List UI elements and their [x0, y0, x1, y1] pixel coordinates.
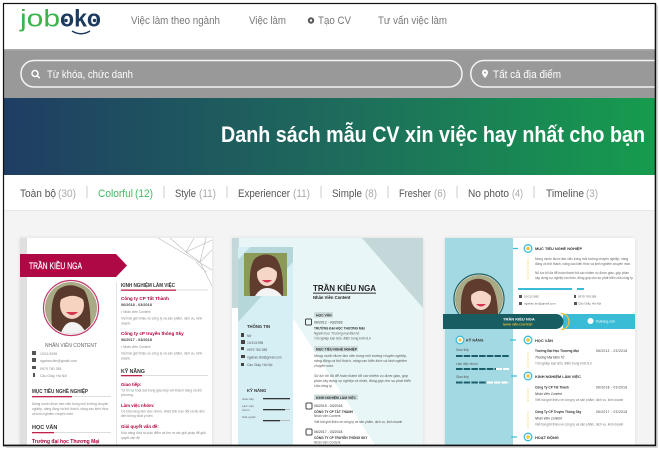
name heading [313, 283, 376, 300]
timeline sections [510, 245, 633, 441]
right column sections: Sử lực tôi đủ để hoàn thành tốt các nhiệm vụ được giao, góp [314, 374, 408, 378]
left column text: và kinh nghiệm chuyên môn. [32, 412, 74, 416]
filter tabs: Simple [332, 188, 362, 200]
filter tabs: (30) [58, 188, 76, 200]
timeline sections: Viết bài giới thiệu về công ty và sản phẩm, dịch vụ, kinh doanh [535, 422, 624, 426]
timeline sections: Cầu Giấy, Hà Nội [578, 302, 601, 306]
name band: thutrang.com [596, 320, 615, 324]
right column sections: chuyên môn. [314, 364, 334, 368]
nav links: Việc làm [249, 15, 286, 27]
name ribbon: TRẦN KIỀU NGA [29, 261, 82, 271]
right column sections: năng động và thử thách, nâng cao kiến thức và kinh nghiệm [314, 359, 407, 363]
timeline sections: 06/2017 - 03/2018 [596, 410, 627, 414]
sidebar [238, 247, 293, 445]
filter tabs: Colorful [98, 188, 133, 200]
location field [471, 60, 659, 87]
sidebar: Giao tiếp [242, 397, 254, 401]
timeline sections: MỤC TIÊU NGHỀ NGHIỆP [535, 246, 583, 251]
left column text: 10/11/1995 [40, 352, 57, 356]
timeline sections: ngahan.tlm@gmail.com [524, 302, 556, 306]
sidebar: 0979 760 285 [247, 348, 267, 352]
filter tabs: Fresher [399, 188, 431, 200]
sidebar: THÔNG TIN [247, 324, 270, 329]
timeline sections: Nhân Viên Content [535, 392, 562, 396]
name heading: Nhân Viên Content [313, 295, 351, 300]
location field: Tất cả địa điểm [493, 69, 561, 81]
timeline sections: Nỗ lực tối đa để hoàn thành tốt các nhiệm vụ được giao, góp phần [535, 270, 629, 275]
right column sections: MỤC TIÊU NGHỀ NGHIỆP [316, 346, 358, 352]
sidebar: KỸ NĂNG [247, 388, 266, 393]
right column sections: 06/2017 - 03/2018 [314, 430, 342, 434]
timeline sections: xây dựng sự nghiệp cá nhân, đồng góp cho sự phát triển của công ty. [535, 276, 633, 280]
right column sections: Nhân viên Content [314, 414, 341, 418]
filter tabs: Style [175, 188, 196, 200]
right column text: Tự tin và hoạt bát trong giao tiếp với khách hàng và đối [121, 388, 202, 392]
filter tabs [4, 175, 655, 211]
nav links [131, 15, 447, 27]
left column text: NHÂN VIÊN CONTENT [45, 341, 97, 349]
left column text: Mong muốn được làm việc trong môi trường chuyên [32, 402, 109, 406]
keyword search field: Từ khóa, chức danh [47, 69, 133, 81]
sidebar: ngahan.tlm@gmail.com [247, 356, 282, 360]
keyword search field [21, 60, 462, 87]
CV card 2: pale teal template [232, 238, 423, 445]
timeline sections: 06/2012 - 03/2018 [596, 349, 627, 353]
background shapes [232, 238, 423, 445]
timeline sections: HỌC VĂN [535, 338, 553, 343]
timeline sections: động và thử thách, nâng cao kiến thức và kinh nghiệm chuyên môn. [535, 262, 631, 266]
right column text: Công ty CP Tất Thành [121, 295, 169, 301]
sidebar skills: KỸ NĂNG [466, 338, 484, 342]
search bar [4, 49, 659, 98]
right column text: đến thống nhất ý kiến [121, 414, 153, 418]
sidebar: Làm việc [242, 404, 255, 408]
left column text: nghiệp, năng động và thử thách, nâng cao kiến thức [32, 407, 109, 411]
timeline sections: Công Ty CP Tất Thành [535, 386, 569, 390]
profile photo [244, 253, 287, 296]
filter tabs: (3) [586, 188, 598, 200]
header navigation [19, 6, 447, 34]
right column text: Viết bài giới thiệu về công ty và sản phẩm, dịch vụ, kinh [121, 352, 202, 356]
CV card 1: crimson template [20, 238, 212, 445]
logo: joboko: oko [60, 6, 101, 32]
name band: TRẦN KIỀU NGA [503, 316, 535, 322]
filter tabs: No photo [468, 188, 509, 200]
right column text: phương. [121, 393, 134, 397]
name heading: TRẦN KIỀU NGA [313, 283, 376, 293]
right column text: 06/2018 - 03/2018 [121, 303, 152, 307]
right column text: • Nhân viên Content [121, 310, 150, 314]
right column text: Khả năng đưa ra luận điểm và tìm ra các giải pháp để giải [121, 431, 206, 435]
name band: NHÂN VIÊN CONTENT [503, 322, 533, 326]
sidebar: Nữ [247, 334, 252, 338]
right column sections: phần xây dựng sự nghiệp cá nhân, đồng góp cho sự phát triển [313, 379, 411, 383]
logo: joboko: job [19, 6, 60, 32]
right column sections: 06/2015 - 03/2018 [314, 404, 342, 408]
filter tabs: Toàn bộ [20, 188, 56, 200]
right column sections: HỌC VẤN [316, 314, 332, 318]
right column text: Giải quyết vấn đề: [121, 424, 159, 429]
right column sections: Ngành học: Thương mại điện tử [314, 332, 360, 336]
right column sections: Tốt nghiệp loại Giỏi, điểm trung bình 8.0 [314, 336, 371, 340]
right column text: 06/2017 - 03/2018 [121, 338, 152, 342]
right column text: Công ty cP truyền thông Sky [121, 331, 184, 336]
filter tabs: (11) [199, 188, 216, 200]
left column text: Cầu Giấy, Hà Nội [40, 374, 67, 378]
right column text: • Nhân viên Content [121, 345, 150, 349]
right column sections: Viết bài giới thiệu về công ty và sản phẩm, dịch vụ, kinh doanh [314, 420, 403, 424]
filter tabs: (8) [365, 188, 377, 200]
sidebar skills: Làm việc nhóm [456, 362, 478, 366]
timeline sections: 06/2018 - 03/2018 [596, 386, 627, 390]
right column text: Làm việc nhóm: [121, 403, 155, 408]
nav links: Tư vấn việc làm [378, 15, 447, 27]
left column text [32, 341, 111, 445]
left column text: Trường đại học Thương Mại [32, 439, 100, 445]
timeline sections: Trường Đại Học Thương Mại [535, 349, 579, 353]
right column text [121, 281, 208, 440]
filter tabs: Experiencer [238, 188, 290, 200]
right column text: Viết bài giới thiệu về công ty và sản phẩm, dịch vụ, kinh [121, 316, 202, 320]
left column text: 0979 760 285 [40, 367, 61, 371]
left column text: HỌC VẤN [32, 424, 57, 431]
timeline sections: Thương Mại Điện Tử [535, 356, 566, 360]
sidebar skills: Giao tiếp [456, 375, 469, 379]
name ribbon [20, 254, 127, 277]
filter tabs: (11) [293, 188, 310, 200]
page background [4, 210, 655, 445]
right column sections [306, 312, 411, 444]
right column text: KỸ NĂNG [121, 368, 145, 375]
right column text: doanh. [121, 356, 131, 360]
timeline sections: Tốt nghiệp loại Giỏi, điểm trung bình 8.0 [535, 362, 592, 366]
right column sections: Nhân viên Content [314, 440, 341, 444]
right column sections: của công ty. [314, 384, 333, 388]
timeline sections: 10/11/1995 [524, 294, 539, 298]
filter tabs: (4) [512, 188, 523, 200]
right column sections: CÔNG TY CP TẤT THÀNH [314, 409, 354, 414]
left column text: ngahan.tlm@gmail.com [40, 359, 77, 363]
left column text: MỤC TIÊU NGHỀ NGHIỆP [32, 387, 88, 395]
banner [4, 98, 655, 175]
right column text: Giao tiếp: [121, 382, 142, 387]
nav links: Tạo CV [318, 15, 352, 27]
sidebar: Giải quyết [242, 415, 256, 419]
right column text: doanh. [121, 322, 131, 326]
nav links: Việc làm theo ngành [131, 15, 220, 27]
right column sections: Mong muốn được làm việc trong môi trường chuyên nghiệp, [314, 354, 407, 358]
right column text: quyết vấn đề [121, 436, 140, 440]
timeline sections: Công Ty CP Truyền Thông Sky [535, 410, 582, 414]
sidebar: Cầu Giấy, Hà Nội [247, 363, 273, 367]
filter tabs: (12) [135, 188, 153, 200]
filter tabs: (6) [434, 188, 446, 200]
right column text: Có khả năng làm việc nhóm, nhiệt tình trao đổi và đề đến [121, 410, 205, 414]
sidebar skills: Giao tiếp [456, 348, 469, 352]
profile photo [44, 280, 98, 336]
timeline sections: HOẠT ĐỘNG [535, 435, 559, 440]
right column sections: TRƯỜNG ĐẠI HỌC THƯƠNG MẠI [314, 326, 365, 330]
sidebar skills [456, 336, 509, 382]
name band [443, 314, 635, 330]
timeline sections: Viết bài giới thiệu về công ty và sản phẩm, dịch vụ, kinh doanh [535, 398, 624, 402]
profile photo [453, 273, 505, 314]
logo: joboko [19, 6, 101, 34]
timeline sections: Mong muốn được làm việc trong môi trường chuyên nghiệp, năng [535, 257, 628, 261]
right column text: KINH NGHIỆM LÀM VIỆC [121, 281, 175, 289]
right column sections: KINH NGHIỆM LÀM VIỆC [316, 395, 356, 400]
right column sections: 06/2012 - 03/2018 [314, 320, 342, 324]
timeline sections: Nhân Viên Content [535, 416, 562, 420]
timeline sections: KINH NGHIỆM LÀM VIỆC [535, 374, 581, 379]
timeline sections: 0979 760 285 [578, 294, 597, 298]
right column sections: CÔNG TY CP TRUYỀN THÔNG SKY [314, 435, 368, 440]
CV card 3: timeline template [443, 238, 635, 445]
filter tabs: Timeline [546, 188, 584, 200]
decorative mesh [158, 238, 212, 286]
sidebar: nhóm [242, 408, 250, 412]
sidebar: 10/11/1995 [247, 341, 263, 345]
